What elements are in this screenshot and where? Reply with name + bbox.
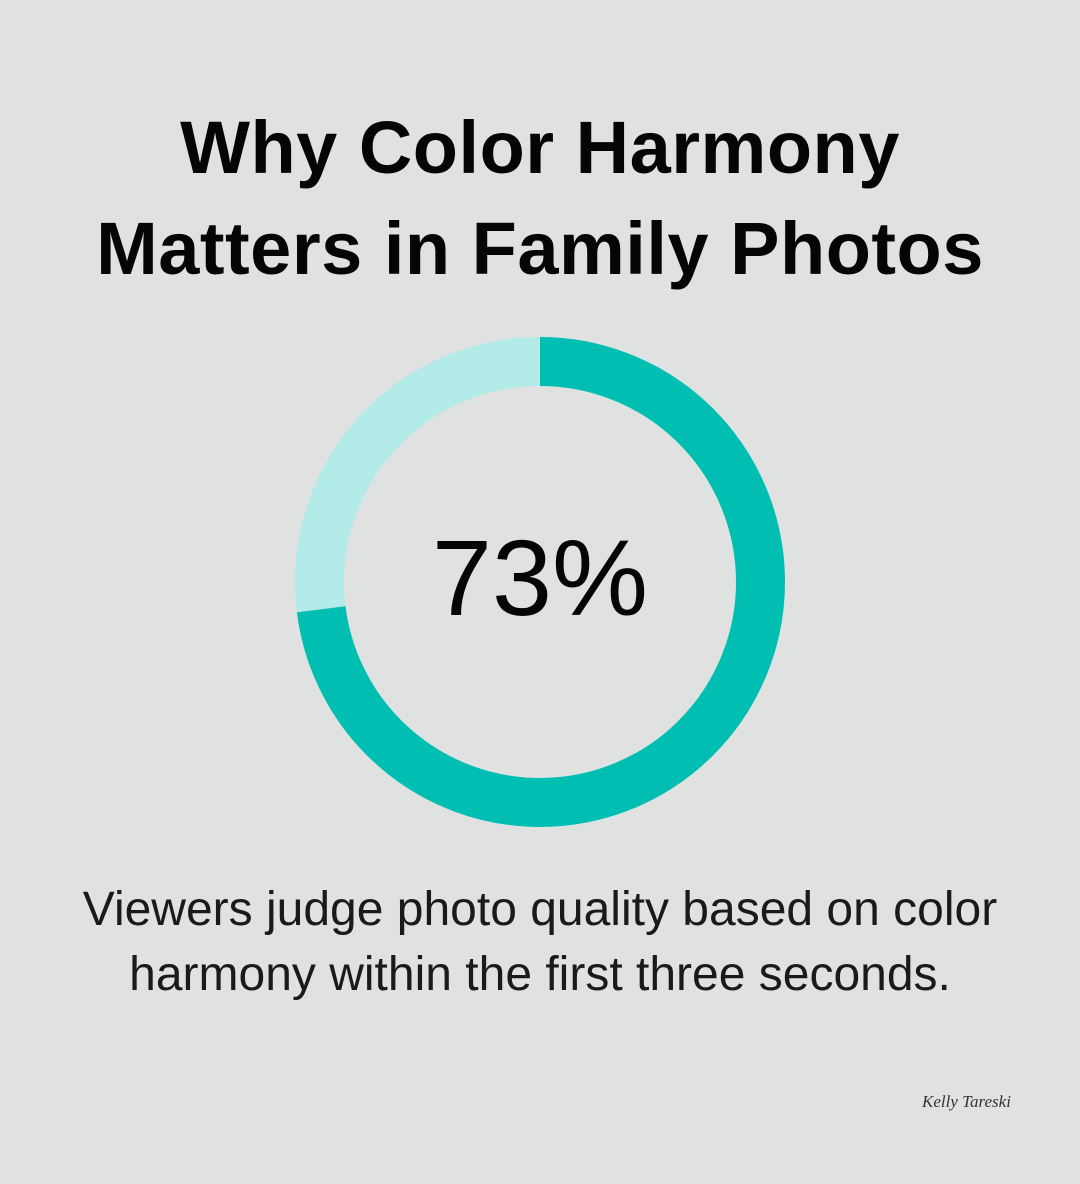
title: Matters in Family Photos [96,207,984,290]
description text: harmony within the first three seconds. [129,948,951,1001]
description text [83,883,997,1001]
description text: Viewers judge photo quality based on color [83,883,997,936]
title [96,106,984,290]
percentage label: 73% [432,517,648,638]
signature logo: Kelly Tareski [922,1092,1011,1111]
title: Why Color Harmony [180,106,900,189]
